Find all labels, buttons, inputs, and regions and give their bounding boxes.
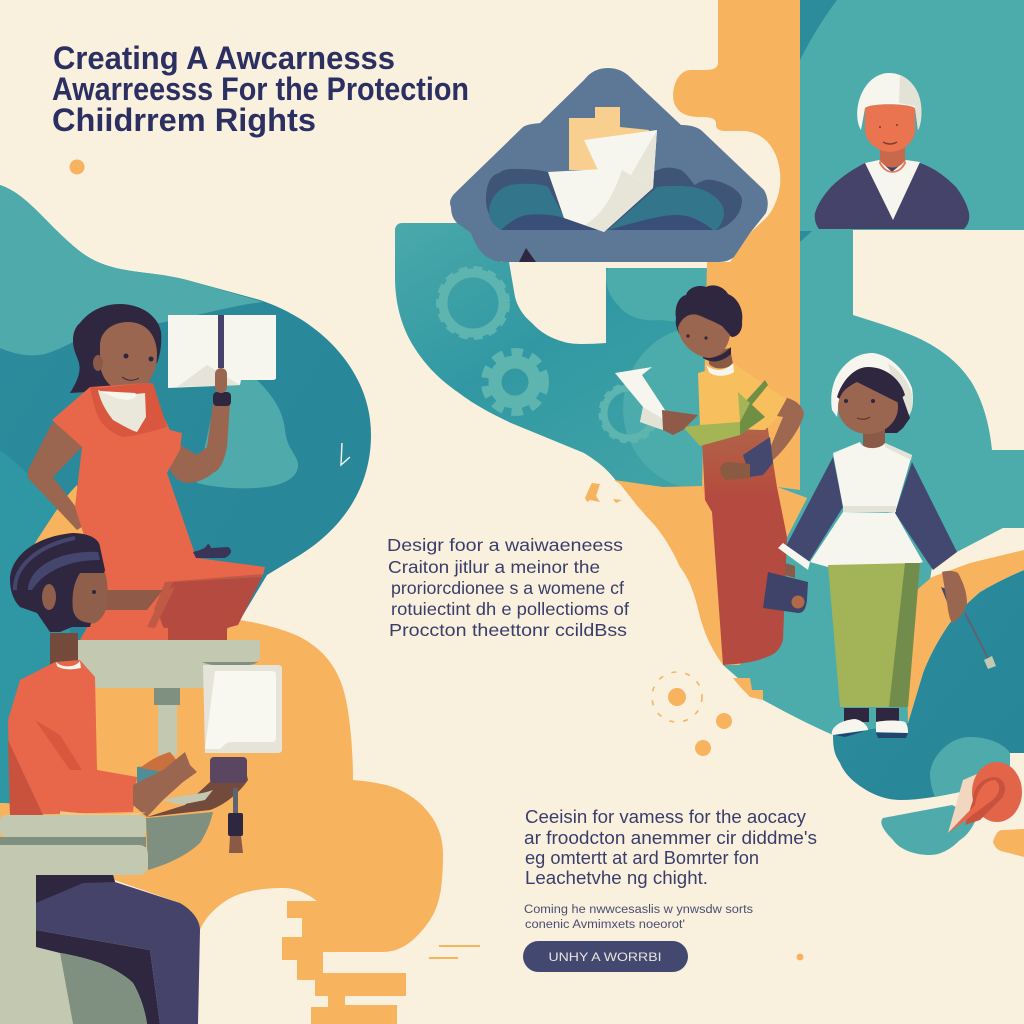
text block: advocacy: eg omtertt at ard Bomrter fon xyxy=(525,848,759,868)
text block: design: Craiton jitlur a meinor the xyxy=(388,557,600,577)
text block: advocacy: Leachetvhe ng chight. xyxy=(525,868,708,888)
title: Chiidrrem Rights xyxy=(52,102,316,138)
text block: design: Proccton theettonr ccildBss xyxy=(389,620,627,640)
panel: orange column xyxy=(673,0,800,490)
figure: seated woman at desk xyxy=(0,533,282,1024)
text block: advocacy: Ceeisin for vamess for the aocacy xyxy=(525,807,806,827)
text block: advocacy: ar froodcton anemmer cir diddme's xyxy=(524,828,817,848)
figure: girl with headscarf xyxy=(763,353,996,738)
panel: left orange blob xyxy=(0,485,480,1024)
text block: small note xyxy=(524,904,753,931)
figure: child reading paper xyxy=(615,285,804,665)
icon: sun and dots xyxy=(585,483,804,960)
panel: left teal wave xyxy=(0,185,371,805)
text block: design xyxy=(387,535,629,640)
icon: bottom right shell xyxy=(881,737,1024,857)
text block: advocacy xyxy=(524,807,817,888)
panel: orange band under figures xyxy=(614,480,807,665)
text block: small note: conenic Avmimxets noeorot' xyxy=(525,919,685,931)
button: UNHY A WORRBI xyxy=(548,950,662,964)
icon: small arrow xyxy=(341,443,350,465)
text block: design: Desigr foor a waiwaeneess xyxy=(387,535,623,555)
icon: orange dot xyxy=(70,160,84,174)
text block: design: proriorcdionee s a womene cf xyxy=(391,578,624,598)
panel: lower right dark teal xyxy=(833,570,1024,800)
text block: small note: Coming he nwwcesaslis w ynwsdw sorts xyxy=(524,904,753,916)
title: Creating A Awcarnesss xyxy=(53,40,395,76)
cream edge under teal xyxy=(584,480,635,510)
panel: right teal block xyxy=(723,0,1024,735)
title: Awarreesss For the Protection xyxy=(52,71,469,107)
icon: boat in cloud xyxy=(450,68,768,262)
text block: design: rotuiectint dh e pollectioms of xyxy=(391,599,629,619)
icon: gears xyxy=(438,268,658,442)
button xyxy=(523,941,688,972)
figure: person top right xyxy=(815,73,969,229)
title xyxy=(52,40,469,138)
figure: woman with book xyxy=(28,304,276,640)
panel: middle teal flow xyxy=(395,223,777,500)
